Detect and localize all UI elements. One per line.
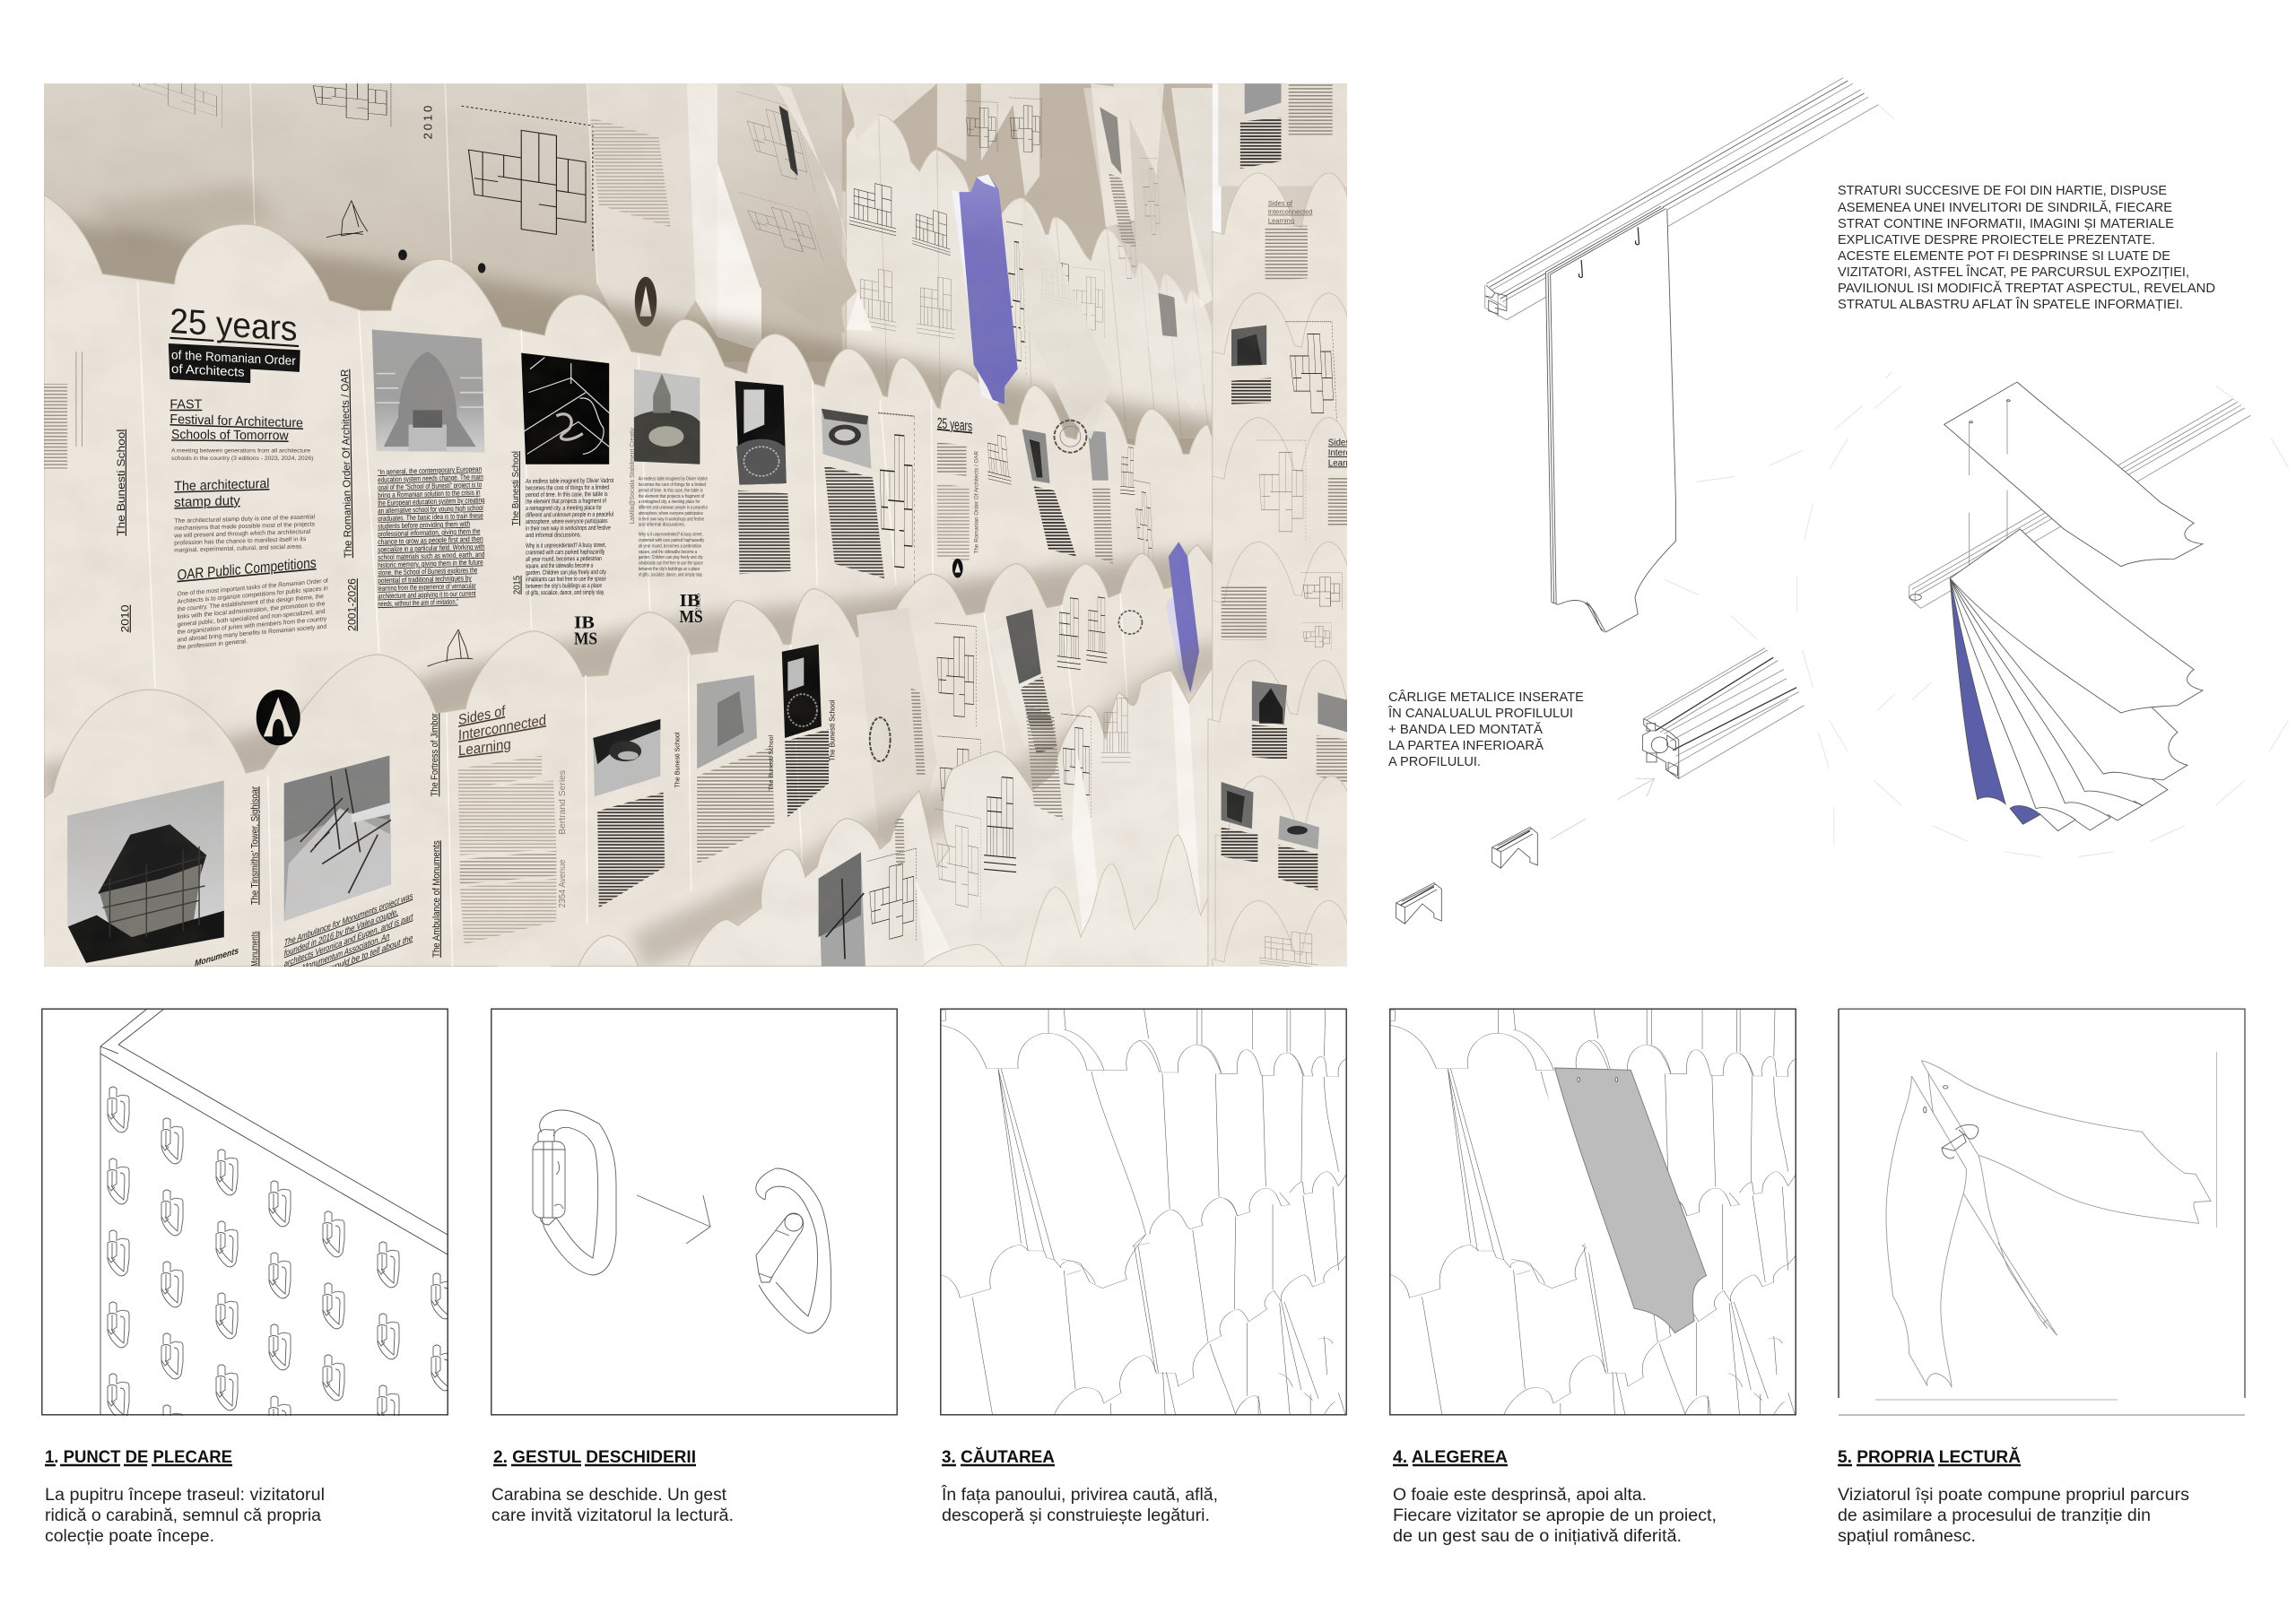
right wall: Interconnected [1268,208,1312,216]
row 3 of scalloped sheets [44,545,1222,967]
panel 5: own reading [1838,1008,2246,1416]
lifted sheet with floor plans [718,83,857,333]
band shadow above row 4 [639,652,1222,951]
text: OAR competitions: general public, both specialized and non-specialized, and [178,609,326,629]
text: vertical tower label: The Tinsmiths' Tower, Sighisoar [249,786,260,905]
text: third column paragraph: of gifts, socialize, dance, and simply stay. [639,572,703,577]
sheet side on [1928,1073,2057,1335]
black band subtitle: of the Romanian Order [171,347,296,368]
caption 1 [45,1447,325,1546]
text: endless table paragraph: garden. Children can play freely and city [526,568,606,577]
text: hooks description: CÂRLIGE METALICE INSERATE [1388,690,1584,705]
caption 5: Viziatorul își poate compune propriul parcurs [1838,1486,2189,1505]
caption 2: care invită vizitatorul la lectură. [491,1506,734,1525]
arrow: t-nut into rail [1551,778,1654,839]
photo: tower narrow [1022,430,1050,483]
text: vertical labels: The Fortress of Jimbor [430,713,440,796]
lifted curved sheets right of the violet sheet [1022,198,1113,439]
text: meeting note: A meeting between generations from all architecture [171,448,310,455]
sheet loose left [1886,1076,1966,1387]
icon: t-nut lower [1396,883,1441,924]
paper sheet stack [1545,206,1676,632]
photo: wooden ladder ruins [284,756,391,921]
text: third column paragraph: atmosphere, where everyone participates [639,511,703,516]
text: layers description: ACESTE ELEMENTE POT FI DESPRINSE SI LUATE DE [1838,248,2170,264]
caption 4 [1393,1447,1717,1546]
text: quote paragraph: graduates. The basic idea is to train these [378,512,483,523]
text: third column paragraph: between the city's buildings as a place [639,567,700,572]
text: endless table paragraph: and informal discussions. [526,531,581,539]
vertical labels: The Romanian Order Of Architects / OAR [339,369,354,558]
text: quote paragraph: architecture and applying it to our current [378,589,476,601]
small 25 years sheet [937,415,972,562]
text: quote paragraph: bring a Romanian solution to the crisis in [378,489,481,499]
text: layers description: EXPLICATIVE DESPRE PROIECTELE PREZENTATE. [1838,232,2155,247]
caption 4: de un gest sau de o inițiativă diferită. [1393,1527,1682,1546]
text: endless table paragraph: all year round, becomes a pedestrian [526,555,602,563]
caption 3: descoperă și construiește legături. [942,1506,1210,1525]
text: OAR competitions: links with the local administration, the promotion to the [178,601,326,621]
heading: Sides of Interconnected Learning: Learning [458,736,511,759]
row 3 contents: The Bunesti School [767,734,775,791]
text: quote paragraph: learning from the experience of vernacular [378,582,476,593]
text: FAST heading: Schools of Tomorrow [171,428,289,443]
text: third column paragraph [639,477,708,577]
text: hooks description: LA PARTEA INFERIOARĂ [1388,738,1544,753]
text: stamp duty: The architectural stamp duty is one of the essential [174,514,316,525]
row 2 of scalloped sheets [44,195,1222,967]
hanging hook pins [1970,401,2007,567]
row 2 left contents: main title sheet [44,301,708,651]
logo: black A badge [257,690,300,745]
text: endless table paragraph: square, and the sidewalks become a [526,562,593,569]
photo: ladder narrow [819,852,865,967]
sheet bottom edge [1584,603,1604,632]
vertical labels: 2015 [513,575,523,595]
text: third column paragraph: crammed with cars parked haphazardly [639,538,704,543]
text: stamp duty: stamp duty [174,493,240,510]
text: quote paragraph: an alternative school for young high school [378,504,483,515]
text: quote paragraph: professional information, giving them the [378,527,481,538]
text: quote paragraph: stone, the School of Bunesti explores the [378,566,478,577]
rail two [1909,399,2250,608]
text: third column paragraph: period of time. In this case, the table is [639,488,703,493]
text: quote paragraph: the European education system by creating [378,496,485,508]
top row of hanging sheets [44,53,1222,361]
text: quote paragraph: education system needs change. The main [378,473,483,484]
text: ambulance paragraph [284,891,413,991]
text: layers description: VIZITATORI, ASTFEL ÎNCAT, PE PARCURSUL EXPOZIȚIEI, [1838,265,2189,280]
drawing: rail profile and stacked paper sheets [1396,77,2289,924]
carabiner ring [1942,1124,1979,1159]
text: FAST heading: FAST [170,398,202,412]
text: quote paragraph [378,465,485,608]
text: layers description: STRATUL ALBASTRU AFLAT ÎN SPATELE INFORMAȚIEI. [1838,297,2183,312]
text: vertical labels [430,713,442,958]
bottom left arches [44,919,551,967]
text: endless table paragraph: different and unknown people in a peaceful [526,511,613,519]
caption 1: La pupitru începe traseul: vizitatorul [45,1486,325,1505]
aluminium rail [1485,78,1878,320]
text: ambulance paragraph: The Ambulance for Monuments project was [284,891,413,949]
logo: serif monogram: MS [680,608,703,627]
text: layers description: STRAT CONTINE INFORMATII, IMAGINI ȘI MATERIALE [1838,216,2174,231]
caption 1: colecție poate începe. [45,1527,214,1546]
text: third column paragraph: a reimagined city, a meeting place for [639,499,700,505]
text: third column paragraph: square, and the sidewalks become a [639,550,698,555]
photo: carpet room 2 [782,645,822,738]
text: endless table paragraph: crammed with cars parked haphazardly [526,548,605,556]
text: hooks description: + BANDA LED MONTATĂ [1388,722,1543,737]
text: endless table paragraph: atmosphere, where everyone participates [526,517,608,525]
text: meeting note [171,448,313,462]
text: layers description: ASEMENEA UNEI INVELITORI DE SINDRILĂ, FIECARE [1838,200,2172,215]
text: ambulance paragraph: founded in 2016 by the Valea couple, [284,907,398,959]
text: quote paragraph: “In general, the contemporary European [378,465,482,476]
white gap behind sheet [1542,1070,1610,1306]
text: layers description: STRATURI SUCCESIVE DE FOI DIN HARTIE, DISPUSE [1838,183,2167,198]
caption 5: 5. PROPRIA LECTURĂ [1838,1446,2021,1467]
text: third column paragraph: and informal discussions. [639,523,685,528]
fan of sheets [1950,529,2203,831]
vertical labels: 2010 [120,604,132,632]
text: stamp duty: The architectural [174,476,269,494]
text: hooks description: A PROFILULUI. [1388,754,1481,769]
text: endless table paragraph: the element that projects a fragment of [526,498,606,506]
text: layers description [1838,183,2215,312]
caption 4: 4. ALEGEREA [1393,1447,1508,1467]
text: third column paragraph: the element that projects a fragment of [639,494,705,499]
heading: Sides of Interconnected Learning: Sides of [458,703,506,728]
heading: Sides of Interconnected Learning: Interconnected [458,712,546,743]
rail close-up [1642,648,1805,778]
row 3 contents: Bertrand Series [558,770,568,835]
caption 3: În fața panoului, privirea caută, află, [941,1485,1218,1505]
heading: 25 years: 25 years [170,301,297,349]
text: meeting note: schools in the country (3 editions - 2023, 2024, 2026) [171,456,313,462]
text: OAR competitions: the country. The establishment of the design theme, the [178,594,324,613]
second rail with sheet fan [1909,382,2250,831]
text: endless table paragraph: An endless table imagined by Olivier Vadrot [526,477,613,485]
band shadow above row 2 [44,252,1222,457]
text: hooks description: ÎN CANALUALUL PROFILULUI [1387,706,1573,721]
text: third column paragraph: An endless table imagined by Olivier Vadrot [639,477,708,482]
right wall: Sides of [1268,199,1293,207]
text: third column paragraph: garden. Children can play freely and city [639,555,703,560]
text: quote paragraph: needs, without the aim of imitation.” [378,598,458,608]
panel 2: opening the carabiner [491,1008,898,1415]
text: endless table paragraph: a reimagined city, a meeting place for [526,504,602,512]
photo: vault corridor [372,330,484,453]
text: endless table paragraph: inhabitants can feel free to use the space [526,575,606,583]
vertical labels: 2001-2026 [347,578,359,631]
top row of hanging sheets: 2010 [422,106,435,139]
violet sheet, lower [1166,542,1199,692]
text: hooks description [1387,690,1584,769]
icon: small house sketch [428,629,473,666]
text: layers description: PAVILIONUL ISI MODIFICĂ TREPTAT ASPECTUL, REVELAND [1838,281,2215,296]
text: endless table paragraph: in their own way in workshops and festive [526,525,611,533]
captions under panels [45,1446,2189,1546]
far left text strip [44,384,67,469]
bright gaps [847,293,1204,967]
logo: serif monogram: IB [680,592,700,611]
curled sheet with ring plan [857,608,937,864]
text: OAR competitions: the organization of juries with members from the country [178,616,327,636]
logos on row 2 tabs [257,592,703,745]
rail with first sheet [1485,78,1878,632]
caption 1: ridică o carabină, semnul că propria [45,1506,321,1525]
row of scalloped sheets, centre back [847,83,1222,454]
text: stamp duty: we will present and through which the architectural [173,529,311,539]
text: endless table paragraph: of gifts, socialize, dance, and simply stay. [526,588,604,596]
logo: serif monogram: IB [574,614,595,633]
caption 5: spațiul românesc. [1838,1527,1976,1546]
vertical labels: The Bunesti School [116,430,127,536]
text: OAR competitions: One of the most important tasks of the Romanian Order of [178,578,328,598]
sheet dividers row 2 [137,282,933,689]
row 2 left contents: main title sheet: 2025 [693,593,701,612]
text: endless table paragraph: becomes the core of things for a limited [526,484,609,491]
caption 2: 2. GESTUL DESCHIDERII [493,1447,696,1467]
row 2 centre contents: The Romanian Order Of Architects / OAR [974,451,980,553]
photo: small spiral photo [593,719,660,796]
caption 3: 3. CĂUTAREA [942,1446,1055,1467]
text: OAR competitions: and abroad bring many benefits to Romanian society and [178,624,326,644]
photo: vault small [697,675,757,768]
text: endless table paragraph: between the city's buildings as a place [526,582,602,590]
text: third column paragraph: becomes the core of things for a limited [639,482,706,488]
row 4 contents [819,698,1130,967]
band shadow above row 3 [44,571,1222,791]
text: endless table paragraph: Why is it unprecedented? A busy street, [526,542,606,550]
text: endless table paragraph [526,477,613,596]
row 3 contents: The Bunesti School [674,732,682,788]
logo: serif monogram [574,592,703,649]
black band subtitle: of Architects [171,361,245,379]
sheet loose right [1921,1061,2211,1223]
caption 2 [491,1447,734,1525]
panel 3: searching among the sheets [940,1008,1347,1415]
text: stamp duty: profession has the chance to manifest itself in its [174,536,307,547]
vertical labels: The Bunesti School [511,451,521,525]
logo: serif monogram: MS [574,630,597,649]
row 4 of scalloped sheets [578,652,1222,967]
text: third column paragraph: different and unknown people in a peaceful [639,506,708,511]
row 3 contents [67,559,1142,991]
right wall: Learning [1268,216,1294,224]
violet sheet [952,174,1018,404]
text: quote paragraph: chance to grow as people first and then [378,535,483,546]
text: OAR competitions: the profession in general. [178,638,248,651]
black band subtitle [169,343,300,383]
text: quote paragraph: historic memory, giving them in the future [378,558,483,569]
text: quote paragraph: specialize in a particular field. Working with [378,542,484,554]
text: third column paragraph: inhabitants can feel free to use the space [639,561,703,567]
top sheet raised [1944,382,2203,567]
text: stamp duty: marginal, experimental, cultural, and social areas. [174,543,303,554]
photo: round shell [822,409,871,469]
text: quote paragraph: goal of the “School of Bunesti” project is to [378,481,482,491]
vertical labels [116,369,523,632]
hooks [1579,227,1639,277]
dashed construction circles [1622,105,2289,482]
text: FAST heading: Festival for Architecture [170,412,303,430]
text: OAR competitions: Architects is to organize competitions for public spaces in [178,586,328,605]
text: third column paragraph: Why is it unprecedented? A busy street, [639,533,703,538]
text: stamp duty: mechanisms that made possible most of the projects [174,521,316,532]
photo: carpet room [735,381,787,485]
row 3 contents: Monuments [249,932,260,967]
panel 1: lectern with carabiners [41,1008,448,1416]
text: third column paragraph: in their own way in workshops and festive [639,516,704,522]
text: OAR competitions: OAR Public Competitions [178,555,317,584]
caption 5 [1838,1446,2189,1546]
text: vertical labels: The Ambulance of Monuments [431,840,442,958]
text: quote paragraph: potential of traditional techniques by [378,574,472,585]
text: FAST heading [170,398,303,443]
photo: paper sheets pavilion wall [44,83,1347,967]
caption 3 [941,1446,1218,1525]
photo: black site map [521,353,609,464]
icon: open carabiner [756,1168,831,1333]
small 25 years sheet: 25 years [937,415,972,435]
grey detached sheet [1554,1068,1707,1333]
photo: scaffold tower [987,609,1057,754]
row 2 left contents: main title sheet: LaMila@Sociala Stabilment Creativ [628,428,636,525]
photo: tower with scaffolding [67,780,224,967]
text: stamp duty [173,474,316,554]
caption 1: 1. PUNCT DE PLECARE [45,1447,232,1467]
caption 4: Fiecare vizitator se apropie de un proiect, [1393,1506,1717,1525]
row 2 centre contents [735,381,1153,586]
caption 2: Carabina se deschide. Un gest [491,1486,727,1505]
row 3 contents: The Bunesti School [829,699,837,761]
arrow: closed to open [637,1195,710,1244]
icon: carabiner grid [108,1087,453,1451]
ring plan detail [1054,421,1086,453]
icon: t-nut upper [1492,828,1537,868]
icon: closed carabiner [533,1110,616,1275]
heading: Sides of Interconnected Learning [458,703,546,759]
row 3 contents: 2354 Avenue [558,860,568,907]
text: third column paragraph: all year round, becomes a pedestrian [639,543,701,549]
caption 4: O foaie este desprinsă, apoi alta. [1393,1486,1647,1505]
logo: top dark badge [635,277,657,326]
caption 5: de asimilare a procesului de tranziție din [1838,1506,2151,1525]
photo: park and church [634,369,700,464]
text: endless table paragraph: period of time. In this case, the table is [526,490,608,499]
text: OAR competitions [178,554,328,651]
text: quote paragraph: students before providing them with [378,520,470,531]
right wall [1208,83,1368,1340]
text: quote paragraph: school materials such as wood, earth, and [378,551,485,561]
logo: small centre badge [952,559,963,577]
panel 4: choosing a sheet [1389,1008,1796,1415]
